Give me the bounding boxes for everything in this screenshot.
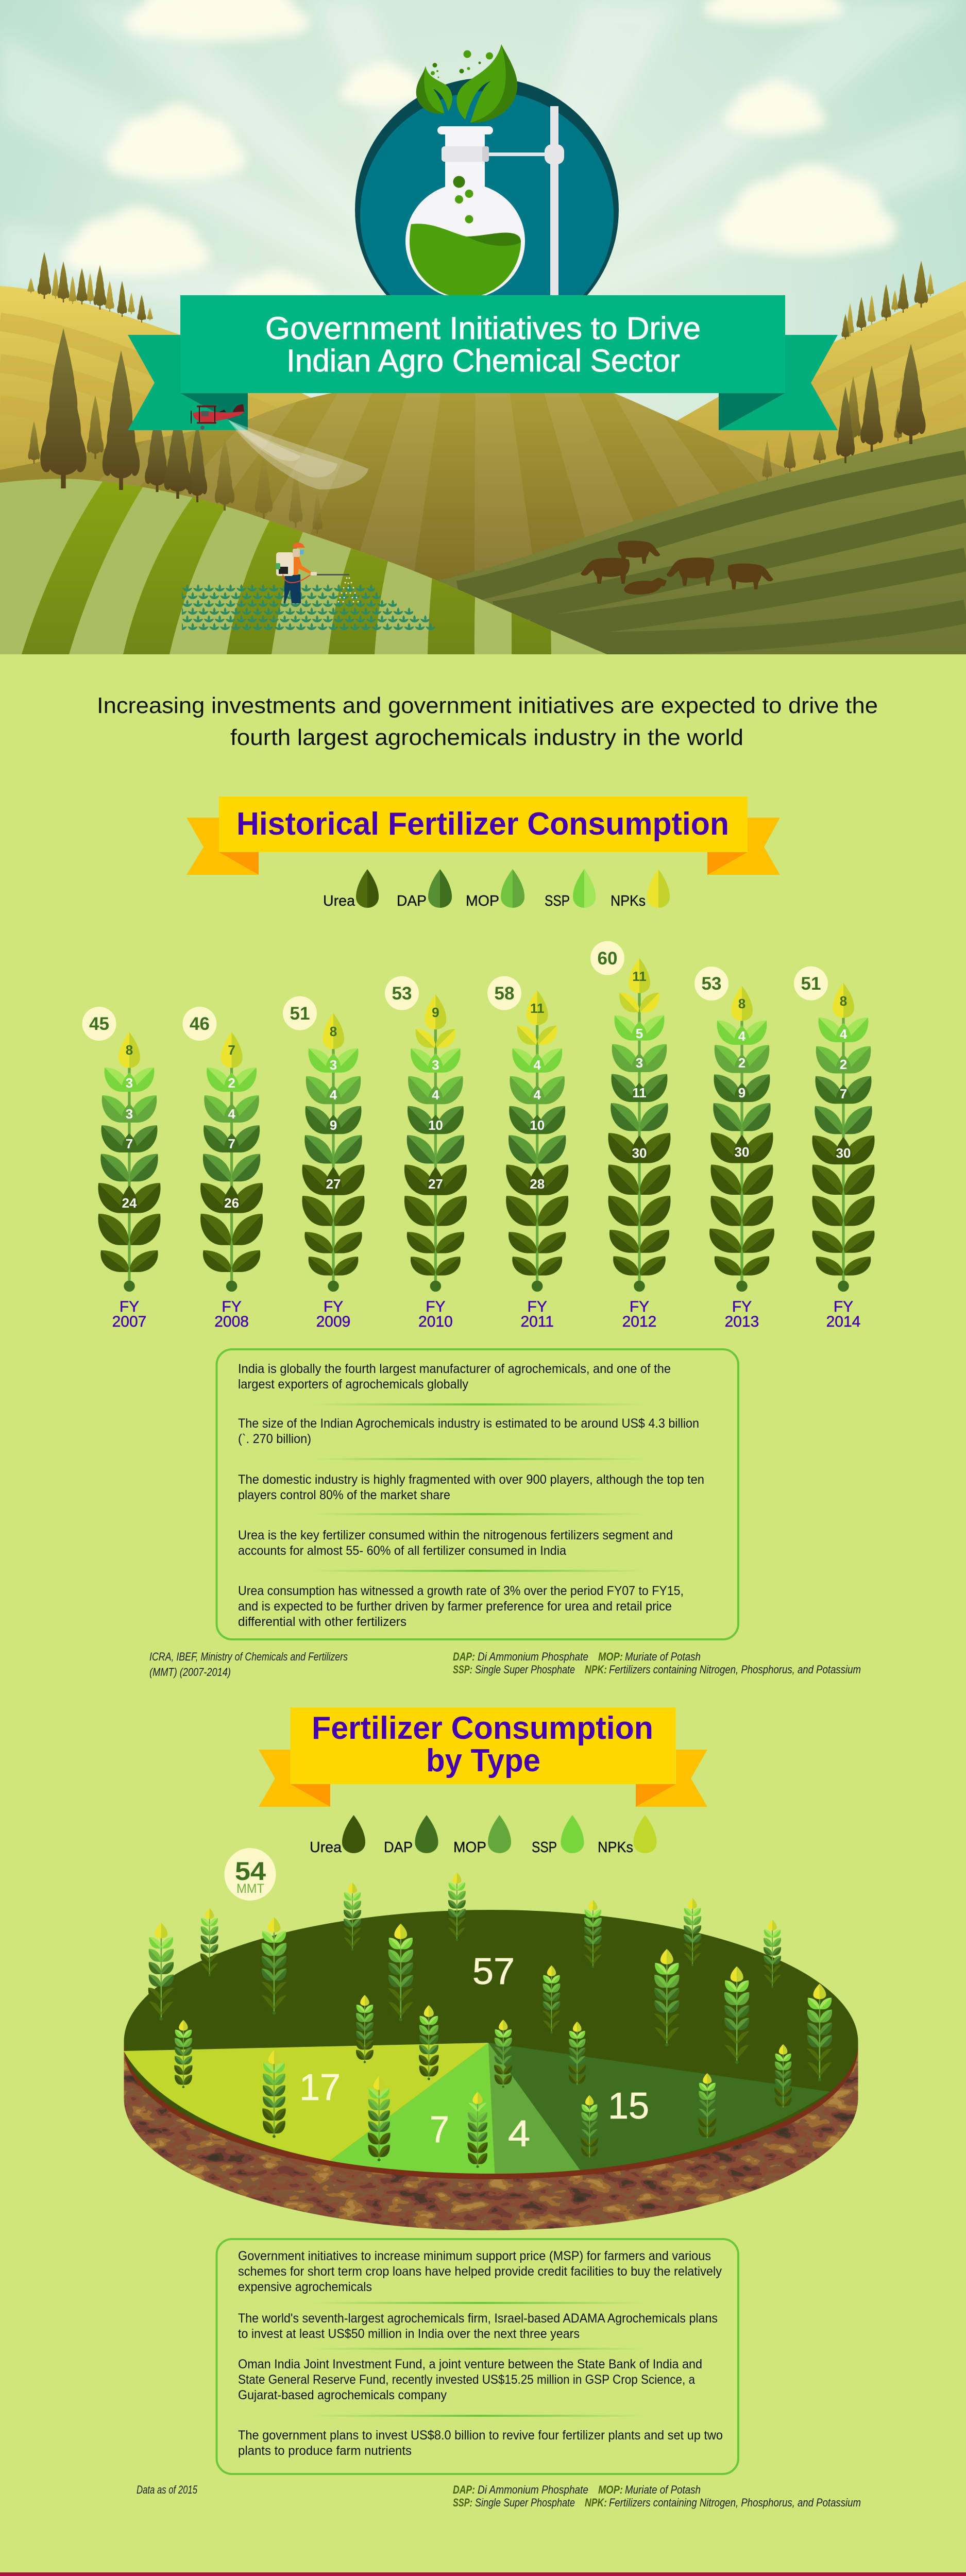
panel: industry facts: players control 80% of the market share — [238, 1488, 450, 1502]
banner tails — [187, 818, 780, 875]
plant chart: FY2008: 7 — [228, 1136, 235, 1151]
source note — [149, 1650, 348, 1679]
panel: industry facts — [216, 1349, 738, 1639]
legend: fertilizer types: SSP — [545, 893, 570, 909]
legend: fertilizer types, flat: Urea — [310, 1839, 342, 1856]
trees: upper right ridge — [841, 261, 934, 340]
plant chart: FY2014: 51 — [801, 974, 821, 994]
plant chart: FY2014: 8 — [840, 993, 847, 1009]
small leaf — [416, 66, 452, 114]
abbreviations note: NPK: — [585, 1663, 607, 1676]
banner heading — [312, 1710, 653, 1778]
plant chart: FY2012 — [590, 941, 671, 1330]
plant chart: FY2007: FY — [120, 1298, 139, 1315]
plant chart: FY2013: 9 — [738, 1085, 745, 1100]
ribbon band — [180, 295, 785, 393]
plant chart: FY2012: 60 — [598, 948, 617, 969]
slice: MOP 4 — [488, 2043, 580, 2174]
pie chart: field disc — [124, 1873, 858, 2230]
abbreviations note 2: MOP: — [598, 2483, 623, 2496]
plant chart: FY2011: 4 — [533, 1087, 541, 1103]
banner band — [291, 1707, 676, 1784]
plant chart: FY2009 — [283, 996, 365, 1330]
right green hill — [437, 427, 966, 654]
central brown hill — [0, 393, 793, 654]
plant chart: FY2011: FY — [528, 1298, 547, 1315]
title ribbon — [128, 295, 838, 430]
legend: fertilizer types: NPKs — [611, 893, 646, 909]
total callout: 54 MMT: 54 — [235, 1857, 266, 1886]
plant chart: FY2009: 51 — [290, 1004, 310, 1024]
plant chart: FY2014: 2014 — [826, 1313, 860, 1330]
plant chart: FY2012: 2012 — [622, 1313, 656, 1330]
legend: fertilizer types: Urea — [323, 893, 355, 909]
slice: SSP 7 — [330, 2043, 495, 2174]
plant chart: FY2011: 28 — [530, 1176, 545, 1192]
panel: industry facts: (`. 270 billion) — [238, 1432, 311, 1446]
panel: government initiatives — [216, 2239, 738, 2474]
plant chart: FY2012: 3 — [636, 1055, 643, 1071]
plant chart: FY2009: 27 — [326, 1176, 341, 1192]
plant chart: FY2014: 30 — [836, 1145, 851, 1161]
plant chart: FY2014: 7 — [840, 1086, 847, 1101]
panel: industry facts: and is expected to be further driven by farmer preference for urea and retail price — [238, 1599, 672, 1614]
plant chart: FY2010: 3 — [432, 1057, 439, 1073]
trees: left foreground — [28, 328, 323, 534]
panel: industry facts: differential with other fertilizers — [238, 1615, 406, 1629]
plant chart: FY2014: 4 — [840, 1026, 848, 1042]
slice values: 17 — [299, 2067, 341, 2108]
total callout: 54 MMT: MMT — [236, 1882, 264, 1896]
abbreviations note 2: SSP: — [453, 2496, 472, 2509]
plant chart: FY2013: 4 — [738, 1028, 746, 1044]
plant chart: FY2013: 30 — [735, 1144, 749, 1160]
panel: government initiatives: Gujarat-based agrochemicals company — [238, 2388, 447, 2402]
abbreviations note: Fertilizers containing Nitrogen, Phosphorus, and Potassium — [609, 1663, 861, 1676]
section banner: historical fertilizer consumption — [187, 796, 780, 875]
legend: fertilizer types, flat: NPKs — [598, 1839, 633, 1856]
panel: government initiatives: Oman India Joint Investment Fund, a joint venture between the State Bank of India and — [238, 2357, 702, 2371]
legend: fertilizer types, flat — [310, 1815, 656, 1856]
plant chart: FY2008: 46 — [190, 1014, 210, 1034]
plant chart: FY2009: 9 — [330, 1117, 337, 1133]
plant chart: FY2008: 2008 — [214, 1313, 249, 1330]
plant chart: FY2010: FY — [426, 1298, 446, 1315]
plant chart: FY2009: 2009 — [316, 1313, 350, 1330]
abbreviations note 2: Muriate of Potash — [625, 2483, 701, 2496]
panel: government initiatives: to invest at least US$50 million in India over the next three years — [238, 2327, 580, 2341]
abbreviations note: Di Ammonium Phosphate — [478, 1650, 588, 1663]
plant chart: FY2012: 5 — [636, 1026, 643, 1041]
plant chart: FY2007: 3 — [126, 1075, 133, 1091]
plant chart: FY2011 — [487, 976, 568, 1330]
plant chart: FY2011: 11 — [530, 1001, 544, 1016]
panel: industry facts: accounts for almost 55- 60% of all fertilizer consumed in India — [238, 1544, 566, 1558]
plant chart: FY2010 — [385, 976, 467, 1330]
plant chart: FY2010: 10 — [428, 1117, 443, 1133]
plant chart: FY2012: 11 — [632, 1085, 647, 1100]
sky — [0, 0, 966, 515]
soil edge — [124, 2043, 858, 2230]
plant chart: FY2011: 10 — [530, 1117, 545, 1133]
abbreviations note: Single Super Phosphate — [475, 1663, 575, 1676]
large leaf — [456, 44, 517, 123]
slice values: 15 — [608, 2086, 649, 2127]
clouds — [63, 0, 896, 310]
slice values: 57 — [472, 1951, 515, 1992]
hero illustration — [0, 0, 966, 654]
farmer spraying — [276, 543, 359, 603]
cows — [581, 540, 773, 595]
spray droplets — [338, 578, 359, 602]
legend: fertilizer types: DAP — [397, 893, 427, 909]
panel: government initiatives: expensive agrochemicals — [238, 2280, 372, 2294]
abbreviations note 2: DAP: — [453, 2483, 475, 2496]
panel: industry facts: Urea is the key fertilizer consumed within the nitrogenous fertilizers segment and — [238, 1528, 673, 1543]
slice: urea 57 — [124, 1910, 858, 2174]
panel: industry facts: Urea consumption has witnessed a growth rate of 3% over the period FY07 to FY15, — [238, 1584, 684, 1598]
plant chart: FY2014: FY — [834, 1298, 853, 1315]
plant chart: FY2007: 7 — [126, 1136, 133, 1151]
emblem circle — [355, 78, 619, 342]
panel: government initiatives: The government plans to invest US$8.0 billion to revive four fertilizer plants and set up two — [238, 2428, 723, 2443]
sun rays — [0, 0, 966, 330]
plant chart: FY2009: 3 — [330, 1057, 337, 1073]
plant chart: FY2007: 8 — [126, 1042, 133, 1058]
intro statement — [97, 693, 878, 750]
abbreviations note: MOP: — [598, 1650, 623, 1663]
crop duster plane — [191, 404, 244, 430]
plant chart: FY2008: 7 — [228, 1042, 235, 1058]
plant chart: FY2007: 2007 — [112, 1313, 146, 1330]
source note: (MMT) (2007-2014) — [149, 1666, 231, 1679]
plant chart: FY2013: 8 — [738, 996, 745, 1011]
plant chart: FY2013: FY — [732, 1298, 752, 1315]
left yellow hill — [0, 286, 314, 515]
panel: government initiatives: schemes for short term crop loans have helped provide credit facilities to buy the relatively — [238, 2264, 722, 2279]
page background — [0, 654, 966, 2572]
trees: upper left ridge — [27, 252, 153, 323]
data date note: Data as of 2015 — [137, 2483, 198, 2496]
plant chart: FY2009: FY — [324, 1298, 343, 1315]
total callout: 54 MMT — [225, 1848, 276, 1901]
crop rows — [182, 584, 435, 631]
abbreviations note: Muriate of Potash — [625, 1650, 701, 1663]
plant chart: FY2010: 4 — [432, 1087, 439, 1103]
plant chart: FY2011: 58 — [495, 984, 514, 1004]
plant chart: FY2008: 26 — [224, 1195, 239, 1211]
intro statement: fourth largest agrochemicals industry in the world — [230, 725, 743, 750]
panel: industry facts: largest exporters of agrochemicals globally — [238, 1377, 468, 1392]
plant chart: FY2013: 2013 — [725, 1313, 759, 1330]
plant chart: FY2014 — [794, 967, 875, 1330]
panel: government initiatives: Government initiatives to increase minimum support price (MSP) for farmers and various — [238, 2249, 711, 2263]
plant chart: FY2008: 4 — [228, 1106, 235, 1122]
plant chart: FY2012: FY — [630, 1298, 649, 1315]
panel: industry facts: India is globally the fourth largest manufacturer of agrochemicals, and one of the — [238, 1362, 671, 1376]
plant chart: FY2012: 30 — [632, 1145, 647, 1161]
banner band — [219, 796, 748, 852]
bubbles — [431, 50, 493, 224]
wheat plants on field — [148, 1873, 833, 2168]
abbreviations note — [453, 1650, 861, 1676]
slice values — [299, 1951, 649, 2155]
clamp — [442, 146, 489, 162]
plant chart: FY2013 — [694, 967, 774, 1330]
right yellow hill — [644, 281, 966, 515]
section banner: consumption by type — [259, 1707, 707, 1807]
slice values: 4 — [508, 2113, 530, 2155]
plant chart: FY2011: 2011 — [520, 1313, 554, 1330]
abbreviations note 2: Single Super Phosphate — [475, 2496, 575, 2509]
plant chart: FY2009: 8 — [330, 1024, 337, 1039]
plant chart: FY2007: 45 — [89, 1014, 109, 1034]
slice values: 7 — [430, 2109, 449, 2150]
abbreviations note 2 — [453, 2483, 861, 2509]
legend: fertilizer types — [323, 869, 670, 909]
flask glass — [405, 126, 525, 299]
plant chart: FY2010: 53 — [392, 984, 412, 1004]
abbreviations note 2: Di Ammonium Phosphate — [478, 2483, 588, 2496]
abbreviations note: SSP: — [453, 1663, 472, 1676]
plant chart: FY2007: 24 — [122, 1195, 137, 1211]
plant chart: FY2012: 11 — [632, 969, 647, 984]
banner tails — [259, 1750, 707, 1807]
slice: DAP 15 — [488, 2043, 830, 2170]
abbreviations note: DAP: — [453, 1650, 475, 1663]
main title: Government Initiatives to Drive — [265, 311, 701, 346]
plant chart: FY2013: 53 — [702, 974, 721, 994]
rim — [124, 1916, 858, 2179]
source note: ICRA, IBEF, Ministry of Chemicals and Fertilizers — [149, 1650, 348, 1663]
trees: right foreground — [762, 344, 926, 481]
banner heading: by Type — [426, 1743, 540, 1778]
flask emblem — [355, 44, 619, 342]
intro statement: Increasing investments and government initiatives are expected to drive the — [97, 693, 878, 718]
banner heading: Fertilizer Consumption — [312, 1710, 653, 1746]
plant chart: FY2011: 4 — [533, 1057, 541, 1073]
plant chart: FY2010: 27 — [428, 1176, 443, 1192]
panel: government initiatives: The world's seventh-largest agrochemicals firm, Israel-based ADAMA Agrochemicals plans — [238, 2311, 718, 2326]
plant chart: FY2008 — [182, 1007, 263, 1330]
red divider band — [0, 2572, 966, 2576]
panel: industry facts: The size of the Indian Agrochemicals industry is estimated to be around US$ 4.3 billion — [238, 1416, 699, 1431]
retort stand — [489, 106, 564, 297]
legend: fertilizer types, flat: MOP — [453, 1839, 486, 1856]
plant chart: FY2007: 3 — [126, 1106, 133, 1122]
banner heading: Historical Fertilizer Consumption — [236, 806, 729, 842]
panel: government initiatives: State General Reserve Fund, recently invested US$15.25 million in GSP Crop Science, a — [238, 2372, 695, 2387]
flask liquid — [410, 224, 521, 298]
main title — [265, 311, 701, 378]
plant chart: FY2007 — [82, 1007, 161, 1330]
crop spray cone — [228, 420, 368, 489]
plant chart: FY2010: 9 — [432, 1005, 439, 1020]
legend: fertilizer types, flat: DAP — [384, 1839, 413, 1856]
abbreviations note 2: Fertilizers containing Nitrogen, Phosphorus, and Potassium — [609, 2496, 861, 2509]
main title: Indian Agro Chemical Sector — [286, 343, 680, 378]
plant chart: FY2010: 2010 — [418, 1313, 453, 1330]
left green hill — [0, 474, 607, 654]
abbreviations note 2: NPK: — [585, 2496, 607, 2509]
plant chart: FY2008: FY — [222, 1298, 242, 1315]
ribbon tails — [128, 335, 838, 430]
plant chart: FY2013: 2 — [738, 1055, 745, 1071]
plant chart: FY2008: 2 — [228, 1075, 235, 1091]
legend: fertilizer types: MOP — [466, 893, 499, 909]
plant chart: FY2009: 4 — [330, 1087, 337, 1103]
slice: NPK 17 — [124, 2043, 488, 2161]
panel: industry facts: The domestic industry is highly fragmented with over 900 players, although the top ten — [238, 1472, 704, 1487]
plant chart: FY2014: 2 — [840, 1057, 847, 1072]
panel: government initiatives: plants to produce farm nutrients — [238, 2444, 412, 2458]
legend: fertilizer types, flat: SSP — [532, 1839, 557, 1856]
